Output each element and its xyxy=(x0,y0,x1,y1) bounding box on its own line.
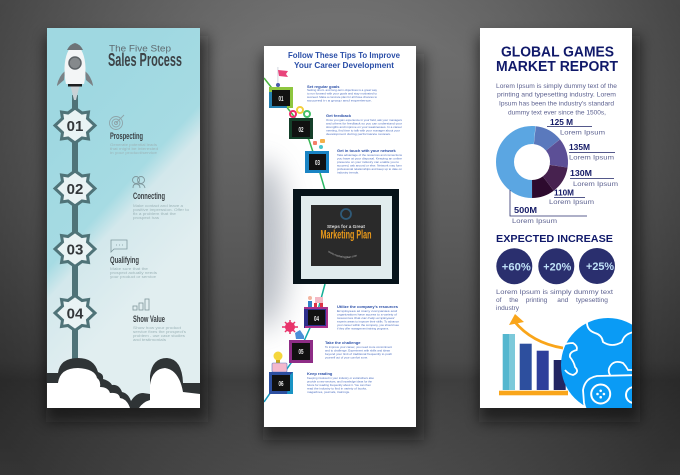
label: 500M xyxy=(510,190,587,225)
marketing plan image xyxy=(293,189,399,284)
tip text: resources: Employees at many companies and xyxy=(337,309,397,313)
step: connecting xyxy=(132,176,189,220)
panel background xyxy=(480,28,632,408)
step: qualifying: your product or service xyxy=(110,275,156,279)
stat: +20%: +20% xyxy=(543,261,572,273)
icon: feedback shapes xyxy=(290,107,310,117)
step 01 badge xyxy=(55,108,95,143)
panel: sales process xyxy=(47,28,200,408)
tip text: resources: resources that can help employees' xyxy=(337,316,396,320)
title: The Five Step xyxy=(109,44,171,54)
tip text: network: Take advantage of the resources and connections xyxy=(337,153,402,157)
intro text: Lorem Ipsum is simply dummy text of the xyxy=(496,83,617,90)
body text: the xyxy=(509,297,519,304)
tip text: challenge: and to challenge. Experiment with skills and ideas xyxy=(325,348,390,352)
tip text: feedback: Once you gain experience in your field, ask your managers xyxy=(326,118,402,122)
icon: bar chart xyxy=(133,299,149,310)
icon: chat bubble xyxy=(111,240,127,252)
tip text: challenge: To improve your career, you need more commitment xyxy=(325,345,392,349)
heading: expected increase: EXPECTED INCREASE xyxy=(496,234,613,245)
body text: typesetting xyxy=(576,297,608,304)
step: qualifying: Make sure that the xyxy=(110,267,148,271)
step: show value: Show Value xyxy=(133,314,165,325)
step: show value xyxy=(133,299,186,342)
tip text: feedback: and others for feedback so you can understand your xyxy=(326,122,402,126)
tip text: resources: organizations have access to a variety of xyxy=(337,312,397,316)
step: connecting: Connecting xyxy=(133,191,165,202)
title: Your Career Development xyxy=(294,60,394,70)
icon: gear and puzzle xyxy=(282,320,304,339)
label: 110M: Lorem Ipsum xyxy=(549,199,595,206)
icon: target xyxy=(110,115,124,130)
panel background xyxy=(47,28,200,408)
tip text: reading: future for reading frequently about it. You can then xyxy=(307,383,371,387)
tip text: challenge: beyond your limit of traditional frequently to push xyxy=(325,352,392,356)
clouds xyxy=(47,358,200,408)
tip text: regular goals: Set regular goals xyxy=(307,84,340,89)
step 03 xyxy=(305,151,329,173)
body text: and xyxy=(557,297,569,304)
tip text: regular goals: succeed. Make a concrete plan for all those chances to xyxy=(307,95,377,99)
step: connecting: Make contact and leave a xyxy=(133,204,183,208)
label: 135M: 135M xyxy=(569,143,590,152)
tip text: resources: Utilize the company's resources xyxy=(337,304,399,309)
tip text: feedback: meeting, find time to talk with your manager about your xyxy=(326,128,400,132)
label: 125 M xyxy=(547,118,606,136)
label: 130M: Lorem Ipsum xyxy=(573,181,619,188)
marketing plan image: Marketing Plan xyxy=(320,230,372,242)
tip text: feedback: development during performance reviews. xyxy=(326,132,391,136)
title xyxy=(496,44,618,75)
title: Follow These Tips To Improve xyxy=(288,50,400,60)
marketing plan image: Steps for a Great xyxy=(327,224,365,230)
tip text: network: professional relationships and keep up to date on xyxy=(337,167,402,171)
body text: Lorem Ipsum is simply dummy text xyxy=(496,289,613,296)
step: show value: Show how your product xyxy=(133,326,181,330)
tip text: challenge: yourself out of your comfort zone. xyxy=(325,356,368,360)
icon: light bulb person xyxy=(272,352,287,372)
step 06: 06 xyxy=(278,381,284,388)
step 03 badge xyxy=(55,232,95,266)
career route line xyxy=(264,78,325,402)
panel: career tips xyxy=(264,46,416,427)
tip text: reading: Keeping involved in your industry or extra/others also xyxy=(307,376,374,380)
label: 110M xyxy=(549,188,595,206)
title: Sales Process xyxy=(108,50,182,70)
icon: people xyxy=(132,176,145,188)
bar chart xyxy=(499,334,568,395)
step 02 badge xyxy=(55,171,95,206)
intro text xyxy=(496,83,617,116)
tip text: network: succeed, ask around or else. Network may form xyxy=(337,164,403,168)
icon: globe with game controller xyxy=(561,318,655,420)
tip text: network: you have at your disposal. Keeping an online xyxy=(337,156,402,160)
tip text: reading: read the industry to find in variety of books, xyxy=(307,386,367,390)
label: 130M: 130M xyxy=(570,169,592,178)
step 02: 02 xyxy=(298,127,304,134)
step 02 badge: 02 xyxy=(67,181,83,198)
step 05 xyxy=(289,340,313,363)
timeline stem xyxy=(72,95,78,370)
step: connecting: prospect has xyxy=(133,216,159,220)
stat: +25% xyxy=(579,248,615,284)
label: 125 M: 125 M xyxy=(550,118,573,127)
step 04 xyxy=(304,307,328,328)
step: connecting: fix a problem that the xyxy=(133,212,176,216)
step 04 badge: 04 xyxy=(67,306,84,322)
step 01: 01 xyxy=(278,96,284,103)
label: 500M: 500M xyxy=(514,206,537,215)
step 01 badge: 01 xyxy=(67,118,83,135)
step: prospecting: that might be interested xyxy=(110,147,158,151)
body text xyxy=(496,289,613,312)
body text: printing xyxy=(526,297,548,304)
icon: flag xyxy=(276,67,288,87)
step: qualifying: prospect actually needs xyxy=(110,271,157,275)
step: show value: service fixes the prospect's xyxy=(133,330,186,334)
icon: people group xyxy=(308,296,323,307)
panel: market report xyxy=(480,28,655,420)
intro text: printing and typesetting industry. Lorem xyxy=(497,92,617,98)
label: 135M: Lorem Ipsum xyxy=(569,154,615,162)
label: 500M: Lorem Ipsum xyxy=(512,218,558,225)
tip text: feedback xyxy=(326,113,402,136)
label: 110M: 110M xyxy=(554,188,574,198)
tip text: reading: magazines, journals, trainings. xyxy=(307,390,350,394)
donut chart xyxy=(494,124,570,200)
tip text: resources: your career within the company, you should see xyxy=(337,323,399,327)
step: prospecting: Prospecting xyxy=(110,131,143,142)
stat: +20% xyxy=(538,248,574,284)
marketing plan image: www.marketingplan.com xyxy=(328,250,357,259)
stat: +60% xyxy=(496,248,532,284)
step 05: 05 xyxy=(298,349,304,356)
step 04: 04 xyxy=(314,316,319,323)
title: MARKET REPORT xyxy=(496,59,618,75)
stat: +25%: +25% xyxy=(586,261,614,273)
panel shadows xyxy=(46,36,640,440)
tip text: challenge: Take the challenge xyxy=(325,340,361,345)
label: 130M xyxy=(570,169,619,188)
tip text: challenge xyxy=(325,340,392,360)
panel background xyxy=(264,46,416,427)
tip text: resources: if they offer management training programs. xyxy=(337,326,389,330)
title: GLOBAL GAMES xyxy=(501,44,614,60)
icon: logo xyxy=(341,209,351,219)
step: show value: problem - use case studies xyxy=(133,334,185,338)
tip text: regular goals xyxy=(307,86,377,102)
tip text: resources xyxy=(337,304,399,330)
intro text: dummy text ever since the 1500s, xyxy=(508,110,606,116)
arrow xyxy=(509,314,563,348)
tip text: reading xyxy=(307,371,374,394)
step: prospecting: in your product/service xyxy=(110,151,157,155)
step 03: 03 xyxy=(315,160,320,167)
panel side shading xyxy=(264,150,300,340)
icon: rocket xyxy=(57,43,93,100)
icon: network dots xyxy=(313,139,325,149)
tip text: network: Get in touch with your network xyxy=(337,148,396,153)
step 04 badge xyxy=(55,296,95,330)
tip text: resources: experts areas to improve their skills. To advance xyxy=(337,320,399,324)
tip text: reading: Keep reading xyxy=(307,371,333,376)
tip text: network: industry trends. xyxy=(337,170,359,174)
tip text: reading: provide a new services, and knowledge ideas for the xyxy=(307,380,372,384)
tip text: feedback: strengths and improve on your weaknesses. In a career xyxy=(326,125,402,129)
step 03 badge: 03 xyxy=(67,242,83,258)
step 02 xyxy=(289,118,313,139)
title xyxy=(288,52,400,70)
body text: industry xyxy=(496,305,520,312)
label: 135M xyxy=(569,143,615,162)
tip text: network: presence on your industry can enable you to xyxy=(337,160,399,164)
step: qualifying xyxy=(110,240,157,279)
tip text: regular goals: to run forward with your goals and stay motivated to xyxy=(307,92,377,96)
step: prospecting: Generate potential leads xyxy=(110,143,157,147)
step 06 xyxy=(269,372,293,394)
tip text: regular goals: Setting short- and long-term objectives is a great way xyxy=(307,88,377,92)
stat: +60%: +60% xyxy=(502,261,531,273)
tip text: regular goals: succeed in a group and experience. xyxy=(307,98,372,102)
title xyxy=(108,45,182,66)
step: prospecting xyxy=(110,115,158,155)
tip text: feedback: Get feedback xyxy=(326,113,352,118)
step: show value: and testimonials xyxy=(133,338,166,342)
label: 125 M: Lorem Ipsum xyxy=(560,130,606,136)
tip text: network xyxy=(337,148,403,174)
body text: of xyxy=(496,297,502,304)
step: qualifying: Qualifying xyxy=(110,255,139,266)
intro text: Ipsum has been the industry's standard xyxy=(499,100,614,108)
step: connecting: positive impression. Offer to xyxy=(133,208,189,212)
step 01 xyxy=(269,87,293,108)
